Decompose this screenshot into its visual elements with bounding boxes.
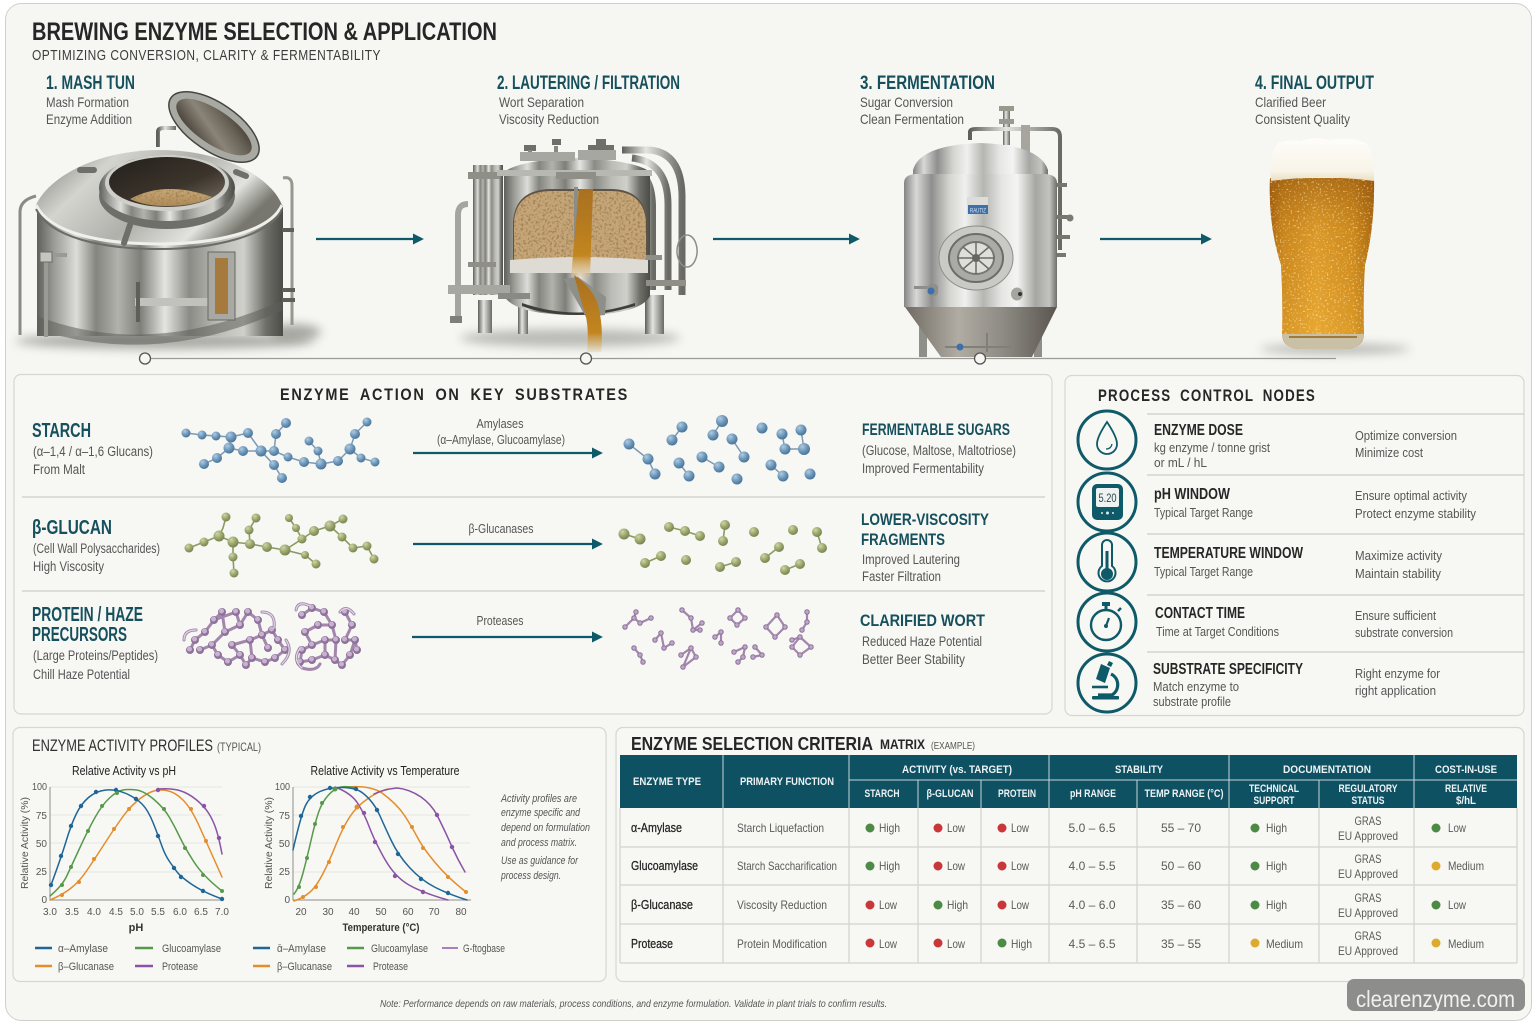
- heading: selection matrix: MATRIX: [880, 737, 925, 752]
- table row: protease: Protein Modification: [737, 937, 827, 951]
- chart: relative activity vs temperature: [263, 763, 471, 934]
- chart note: process design.: [500, 870, 561, 882]
- chart: relative activity vs temperature: 0: [284, 895, 290, 906]
- row: lower-viscosity fragments text: FRAGMENTS: [861, 530, 945, 549]
- table row: protease: Medium: [1448, 937, 1484, 951]
- node: enzyme dose: ENZYME DOSE: [1154, 422, 1243, 439]
- step 1 label: 1. MASH TUN: [46, 73, 135, 94]
- node: pH window: Protect enzyme stability: [1355, 506, 1476, 521]
- chart: relative activity vs temperature: 80: [455, 907, 467, 918]
- table row: beta-glucanase: High: [1266, 898, 1287, 912]
- illustration: fermentation tank: RAUTIZ: [970, 208, 986, 214]
- row: lower-viscosity fragments text: Improved Lautering: [862, 552, 960, 567]
- chart note: [500, 793, 590, 882]
- node: temperature window: TEMPERATURE WINDOW: [1154, 545, 1303, 562]
- node: substrate specificity: Match enzyme to: [1153, 679, 1239, 694]
- chart: relative activity vs pH: 6.5: [194, 907, 208, 918]
- step 4 label: Consistent Quality: [1255, 111, 1350, 127]
- timeline: [140, 353, 1336, 364]
- row: lower-viscosity fragments text: Faster Filtration: [862, 569, 941, 584]
- table header: DOCUMENTATION: [1283, 764, 1371, 776]
- node: substrate specificity: substrate profile: [1153, 694, 1231, 709]
- node: substrate specificity: Right enzyme for: [1355, 666, 1441, 681]
- chart: relative activity vs pH: 4.5: [109, 907, 123, 918]
- table row: alpha-amylase: Starch Liquefaction: [737, 821, 824, 835]
- row: clarified wort text: [860, 611, 986, 667]
- table grid: [620, 808, 1517, 963]
- step 2 label: 2. LAUTERING / FILTRATION: [497, 73, 680, 94]
- legend: temperature chart: [253, 943, 505, 973]
- table header: TECHNICAL: [1249, 783, 1299, 795]
- molecule: lower-viscosity fragments: [618, 520, 827, 575]
- chart note: Use as guidance for: [501, 855, 579, 867]
- icon: stopwatch: [1078, 593, 1136, 651]
- chart note: depend on formulation: [501, 822, 590, 834]
- table header: STABILITY: [1115, 764, 1164, 776]
- step 2 label: Viscosity Reduction: [499, 111, 599, 127]
- node: substrate specificity: SUBSTRATE SPECIFICITY: [1153, 661, 1304, 678]
- icon: microscope: [1078, 654, 1136, 712]
- row: starch substrate text: From Malt: [33, 462, 85, 477]
- row: beta-glucan substrate text: High Viscosity: [33, 559, 104, 574]
- chart: relative activity vs temperature: 50: [279, 839, 290, 850]
- chart: relative activity vs temperature: Relative Activity (%): [263, 797, 275, 889]
- table row: beta-glucanase: Low: [1011, 898, 1029, 912]
- table row: beta-glucanase: 4.0 – 6.0: [1068, 898, 1116, 912]
- table row: beta-glucanase: Low: [1448, 898, 1466, 912]
- node: contact time: substrate conversion: [1355, 625, 1453, 640]
- molecule: peptide fragments: [625, 610, 811, 667]
- chart: relative activity vs temperature: 50: [375, 907, 387, 918]
- legend: pH chart: [35, 943, 221, 973]
- row: starch substrate text: STARCH: [32, 420, 91, 442]
- table header: $/hL: [1456, 795, 1476, 807]
- node: contact time: Time at Target Conditions: [1156, 624, 1279, 639]
- illustration: lauter tun: [448, 142, 697, 352]
- chart: relative activity vs pH: [19, 763, 229, 934]
- legend: temperature chart: ᾱ–Amylase: [277, 943, 326, 955]
- subtitle: OPTIMIZING CONVERSION, CLARITY & FERMENTABILITY: [32, 47, 381, 64]
- table row: alpha-amylase: Low: [1448, 821, 1466, 835]
- table row: protease: 35 – 55: [1161, 937, 1201, 951]
- table row: glucoamylase: EU Approved: [1338, 867, 1398, 881]
- table row: beta-glucanase: β-Glucanase: [631, 897, 693, 912]
- chart note: and process matrix.: [501, 837, 577, 849]
- arrow: beta-glucanases: β-Glucanases: [468, 521, 534, 536]
- table row: beta-glucanase: EU Approved: [1338, 906, 1398, 920]
- table row: glucoamylase: Low: [947, 859, 965, 873]
- table row: alpha-amylase: Low: [947, 821, 965, 835]
- molecule: fermentable sugars: [624, 415, 816, 484]
- row: fermentable sugars text: FERMENTABLE SUGARS: [862, 420, 1010, 439]
- legend: pH chart: β–Glucanase: [58, 961, 114, 973]
- table row: alpha-amylase: 5.0 – 6.5: [1068, 821, 1116, 835]
- chart: relative activity vs pH: 5.0: [130, 907, 144, 918]
- node: substrate specificity: right application: [1355, 683, 1436, 698]
- panel: process control nodes: [1065, 376, 1524, 716]
- chart: relative activity vs pH: 100: [32, 782, 47, 793]
- chart: relative activity vs temperature: 70: [428, 907, 440, 918]
- table row: glucoamylase: 50 – 60: [1161, 859, 1201, 873]
- row: fermentable sugars text: [862, 420, 1016, 476]
- table row: alpha-amylase: High: [1266, 821, 1287, 835]
- step 3 label: 3. FERMENTATION: [860, 73, 995, 94]
- legend: pH chart: Glucoamylase: [162, 943, 221, 955]
- heading: selection matrix: ENZYME SELECTION CRITERIA: [631, 734, 873, 754]
- footnote: Note: Performance depends on raw materials, process conditions, and enzyme formulation. Validate in plant trials to confirm results.: [380, 998, 887, 1010]
- table header: TEMP RANGE (°C): [1144, 788, 1224, 800]
- row: lower-viscosity fragments text: LOWER-VISCOSITY: [861, 510, 990, 529]
- table header: REGULATORY: [1338, 783, 1398, 795]
- table row: alpha-amylase: EU Approved: [1338, 829, 1398, 843]
- legend: temperature chart: Protease: [373, 961, 408, 973]
- step 4 label: Clarified Beer: [1255, 94, 1326, 110]
- step 1 label: [46, 73, 135, 127]
- arrow: amylases: Amylases: [476, 416, 524, 431]
- arrow: proteases: Proteases: [476, 613, 524, 628]
- chart: relative activity vs pH: 5.5: [151, 907, 165, 918]
- node: enzyme dose: [1154, 422, 1457, 470]
- table header: SUPPORT: [1254, 795, 1295, 807]
- chart: relative activity vs temperature: 30: [322, 907, 334, 918]
- arrow: amylases: [413, 416, 593, 453]
- chart: relative activity vs pH: 3.5: [65, 907, 79, 918]
- icon: thermometer: [1078, 533, 1136, 591]
- table row: glucoamylase: High: [1266, 859, 1287, 873]
- chart: relative activity vs temperature: 60: [402, 907, 414, 918]
- table header: RELATIVE: [1445, 783, 1487, 795]
- step 4 label: 4. FINAL OUTPUT: [1255, 73, 1374, 94]
- row: beta-glucan substrate text: [32, 517, 160, 574]
- chart: relative activity vs temperature: 100: [275, 782, 290, 793]
- row: starch substrate text: [32, 420, 153, 477]
- node: temperature window: Maximize activity: [1355, 548, 1442, 563]
- chart: relative activity vs pH: pH: [129, 922, 143, 934]
- chart: relative activity vs pH: 50: [36, 839, 47, 850]
- chart: relative activity vs pH: 3.0: [43, 907, 57, 918]
- panel: enzyme activity profiles: [13, 728, 606, 982]
- node: temperature window: [1154, 545, 1442, 581]
- node: enzyme dose: or mL / hL: [1154, 455, 1207, 470]
- legend: temperature chart: Glucoamylase: [371, 943, 428, 955]
- row: lower-viscosity fragments text: [861, 510, 990, 584]
- icon: pH meter: 5.20: [1098, 491, 1117, 505]
- chart: relative activity vs pH: Relative Activity (%): [19, 797, 31, 889]
- table row: beta-glucanase: High: [947, 898, 968, 912]
- node: pH window: Typical Target Range: [1154, 505, 1253, 520]
- icon: water drop: [1078, 411, 1136, 469]
- chart: relative activity vs pH: 4.0: [87, 907, 101, 918]
- step 1 label: Enzyme Addition: [46, 111, 132, 127]
- table row: alpha-amylase: [631, 814, 1466, 843]
- molecule: protein aggregate: [184, 604, 357, 669]
- row: protein substrate text: PROTEIN / HAZE: [32, 604, 143, 626]
- chart: relative activity vs temperature: 20: [295, 907, 307, 918]
- panel: enzyme action on key substrates: [14, 374, 1052, 714]
- table row: glucoamylase: GRAS: [1354, 852, 1382, 866]
- chart: relative activity vs temperature: Relative Activity vs Temperature: [310, 763, 460, 778]
- heading: process control nodes: PROCESS CONTROL NODES: [1098, 386, 1316, 405]
- row: beta-glucan substrate text: (Cell Wall Polysaccharides): [33, 541, 160, 556]
- node: enzyme dose: kg enzyme / tonne grist: [1154, 440, 1270, 455]
- node: contact time: Ensure sufficient: [1355, 608, 1436, 623]
- table row: glucoamylase: Starch Saccharification: [737, 859, 837, 873]
- table row: alpha-amylase: 55 – 70: [1161, 821, 1201, 835]
- step 2 label: Wort Separation: [499, 94, 584, 110]
- chart: relative activity vs pH: 25: [36, 867, 47, 878]
- table row: beta-glucanase: Viscosity Reduction: [737, 898, 827, 912]
- title block: [32, 18, 497, 64]
- row: protein substrate text: Chill Haze Potential: [33, 667, 130, 682]
- table row: protease: [631, 929, 1484, 958]
- row: clarified wort text: CLARIFIED WORT: [860, 611, 986, 630]
- table row: glucoamylase: [631, 852, 1484, 881]
- legend: temperature chart: β–Glucanase: [277, 961, 332, 973]
- row: clarified wort text: Better Beer Stability: [862, 652, 965, 667]
- node: pH window: [1154, 486, 1476, 521]
- arrow: mash to lauter: [316, 238, 414, 240]
- table row: protease: High: [1011, 937, 1032, 951]
- legend: pH chart: α–Amylase: [58, 943, 108, 955]
- row: protein substrate text: (Large Proteins/Peptides): [33, 648, 158, 663]
- chart: relative activity vs pH: 75: [36, 811, 47, 822]
- row: fermentable sugars text: (Glucose, Maltose, Maltotriose): [862, 443, 1016, 458]
- table row: protease: Protease: [631, 936, 673, 951]
- step 2 label: [497, 73, 680, 127]
- molecule: beta-glucan: [184, 512, 378, 578]
- node: pH window: pH WINDOW: [1154, 486, 1230, 503]
- node: temperature window: Maintain stability: [1355, 566, 1441, 581]
- table row: protease: EU Approved: [1338, 944, 1398, 958]
- chart: relative activity vs temperature: Temperature (°C): [342, 922, 420, 934]
- table header: STARCH: [864, 788, 900, 800]
- chart: relative activity vs pH: 7.0: [215, 907, 229, 918]
- row: beta-glucan substrate text: β-GLUCAN: [32, 517, 112, 539]
- step 1 label: Mash Formation: [46, 94, 129, 110]
- chart: relative activity vs temperature: 40: [348, 907, 360, 918]
- table header: β-GLUCAN: [926, 788, 974, 800]
- table row: glucoamylase: High: [879, 859, 900, 873]
- table header: ENZYME TYPE: [633, 776, 701, 788]
- arrow: lauter to fermentation: [713, 238, 850, 240]
- node: substrate specificity: [1153, 661, 1441, 709]
- table row: glucoamylase: Glucoamylase: [631, 858, 698, 873]
- illustration: beer glass: [1260, 138, 1410, 354]
- arrow: fermentation to final output: [1100, 238, 1202, 240]
- table row: protease: Low: [947, 937, 965, 951]
- heading: selection matrix: (EXAMPLE): [931, 740, 975, 752]
- chart: relative activity vs pH: 0: [41, 895, 47, 906]
- chart: relative activity vs pH: Relative Activity vs pH: [72, 763, 176, 778]
- legend: pH chart: Protease: [162, 961, 198, 973]
- chart: relative activity vs pH: 6.0: [173, 907, 187, 918]
- chart: relative activity vs temperature: 25: [279, 867, 290, 878]
- illustration: fermentation tank: [904, 106, 1074, 357]
- table header: pH RANGE: [1070, 788, 1116, 800]
- table row: protease: 4.5 – 6.5: [1068, 937, 1116, 951]
- step 4 label: [1255, 73, 1374, 127]
- table row: beta-glucanase: [631, 891, 1466, 920]
- molecule: starch: [182, 418, 380, 483]
- table row: glucoamylase: Low: [1011, 859, 1029, 873]
- node: contact time: CONTACT TIME: [1155, 605, 1245, 622]
- table row: alpha-amylase: GRAS: [1354, 814, 1382, 828]
- node: pH window: Ensure optimal activity: [1355, 488, 1467, 503]
- watermark: clearenzyme.com: [1356, 986, 1515, 1012]
- table header: STATUS: [1352, 795, 1384, 807]
- arrow: amylases: (α–Amylase, Glucoamylase): [437, 432, 565, 447]
- table header: PROTEIN: [998, 788, 1036, 800]
- table row: protease: Medium: [1266, 937, 1303, 951]
- heading: activity profiles: (TYPICAL): [217, 740, 261, 754]
- process flow: [15, 73, 1410, 364]
- step 3 label: [860, 73, 995, 127]
- table header: PRIMARY FUNCTION: [740, 776, 834, 788]
- table header: ACTIVITY (vs. TARGET): [902, 764, 1012, 776]
- step 3 label: Clean Fermentation: [860, 111, 964, 127]
- step 3 label: Sugar Conversion: [860, 94, 953, 110]
- table row: alpha-amylase: α-Amylase: [631, 820, 682, 835]
- table row: alpha-amylase: Low: [1011, 821, 1029, 835]
- table row: alpha-amylase: High: [879, 821, 900, 835]
- chart note: Activity profiles are: [500, 793, 577, 805]
- table row: protease: GRAS: [1354, 929, 1382, 943]
- panel: enzyme selection criteria matrix: [616, 728, 1524, 982]
- row: fermentable sugars text: Improved Fermentability: [862, 461, 984, 476]
- row: protein substrate text: PRECURSORS: [32, 624, 127, 646]
- node: enzyme dose: Optimize conversion: [1355, 428, 1457, 443]
- table row: beta-glucanase: 35 – 60: [1161, 898, 1201, 912]
- legend: temperature chart: G-ftogbase: [463, 943, 505, 955]
- node: temperature window: Typical Target Range: [1154, 564, 1253, 579]
- icon: pH meter: [1078, 473, 1136, 531]
- table row: glucoamylase: Medium: [1448, 859, 1484, 873]
- chart: relative activity vs temperature: 75: [279, 811, 290, 822]
- node: contact time: [1155, 605, 1453, 640]
- heading: enzyme action: ENZYME ACTION ON KEY SUBSTRATES: [280, 385, 629, 404]
- row: clarified wort text: Reduced Haze Potential: [862, 634, 982, 649]
- main title: BREWING ENZYME SELECTION & APPLICATION: [32, 18, 497, 46]
- node: enzyme dose: Minimize cost: [1355, 445, 1423, 460]
- chart note: enzyme specific and: [501, 807, 581, 819]
- table header: [620, 755, 1517, 808]
- illustration: mash tun: [15, 78, 321, 349]
- table header: COST-IN-USE: [1435, 764, 1497, 776]
- row: starch substrate text: (α–1,4 / α–1,6 Glucans): [33, 444, 153, 459]
- row: protein substrate text: [32, 604, 158, 682]
- table row: beta-glucanase: Low: [879, 898, 897, 912]
- table row: glucoamylase: 4.0 – 5.5: [1068, 859, 1116, 873]
- heading: activity profiles: ENZYME ACTIVITY PROFILES: [32, 737, 213, 755]
- table row: beta-glucanase: GRAS: [1354, 891, 1382, 905]
- table row: protease: Low: [879, 937, 897, 951]
